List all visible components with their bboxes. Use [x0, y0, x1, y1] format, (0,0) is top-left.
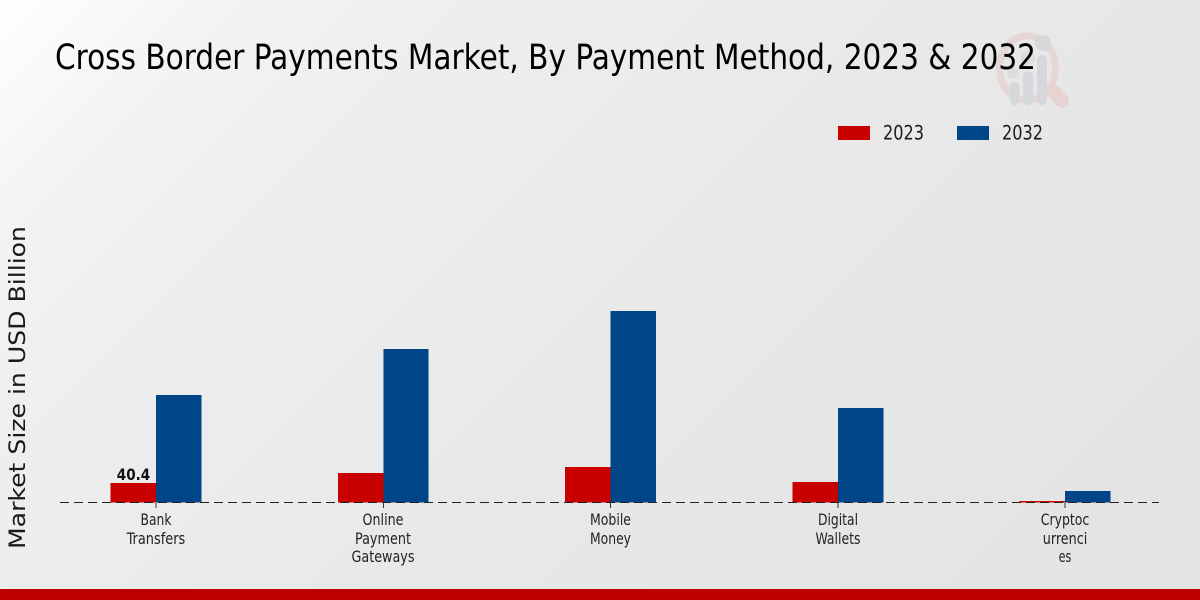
bars: Digital Wallets — [792, 408, 884, 502]
bar chart — [60, 311, 1159, 508]
label: Digital Wallets: Wallets — [816, 529, 860, 548]
label: Digital Wallets — [816, 510, 860, 548]
bars: Cryptocurrencies — [1020, 491, 1110, 502]
legend item: 2032 — [957, 122, 1043, 144]
footer bar — [0, 589, 1200, 600]
label: Bank Transfers — [126, 510, 185, 548]
bars: Mobile Money — [565, 311, 656, 502]
label: Cryptocurrencies: Cryptoc — [1041, 510, 1089, 529]
legend item: 2023 — [838, 122, 924, 144]
label: Bank Transfers: Transfers — [126, 529, 185, 548]
label: Mobile Money — [590, 510, 631, 548]
label: Online Payment Gateways: Online — [362, 510, 404, 529]
label: Cryptocurrencies — [1041, 510, 1089, 566]
icon: watermark logo — [1000, 35, 1062, 105]
label: Cryptocurrencies: urrenci — [1043, 529, 1087, 548]
label: Bank Transfers: Bank — [140, 510, 172, 529]
bars: Bank Transfers — [110, 395, 202, 502]
label: Mobile Money: Money — [590, 529, 631, 548]
legend — [838, 122, 1043, 144]
y axis title: Market Size in USD Billion — [5, 226, 31, 549]
data label: 40.4: 40.4 — [117, 465, 150, 484]
label: Cryptocurrencies: es — [1059, 547, 1071, 566]
title: Cross Border Payments Market, By Payment Method, 2023 & 2032 — [55, 38, 1036, 78]
bars: Online Payment Gateways — [338, 349, 428, 502]
legend item: 2023: 2023 — [883, 122, 924, 144]
label: Online Payment Gateways: Payment — [355, 529, 411, 548]
label: Mobile Money: Mobile — [590, 510, 631, 529]
x axis baseline — [60, 502, 1159, 504]
label: Digital Wallets: Digital — [818, 510, 858, 529]
label: Online Payment Gateways: Gateways — [352, 547, 414, 566]
legend item: 2032: 2032 — [1002, 122, 1043, 144]
label: Online Payment Gateways — [352, 510, 414, 566]
